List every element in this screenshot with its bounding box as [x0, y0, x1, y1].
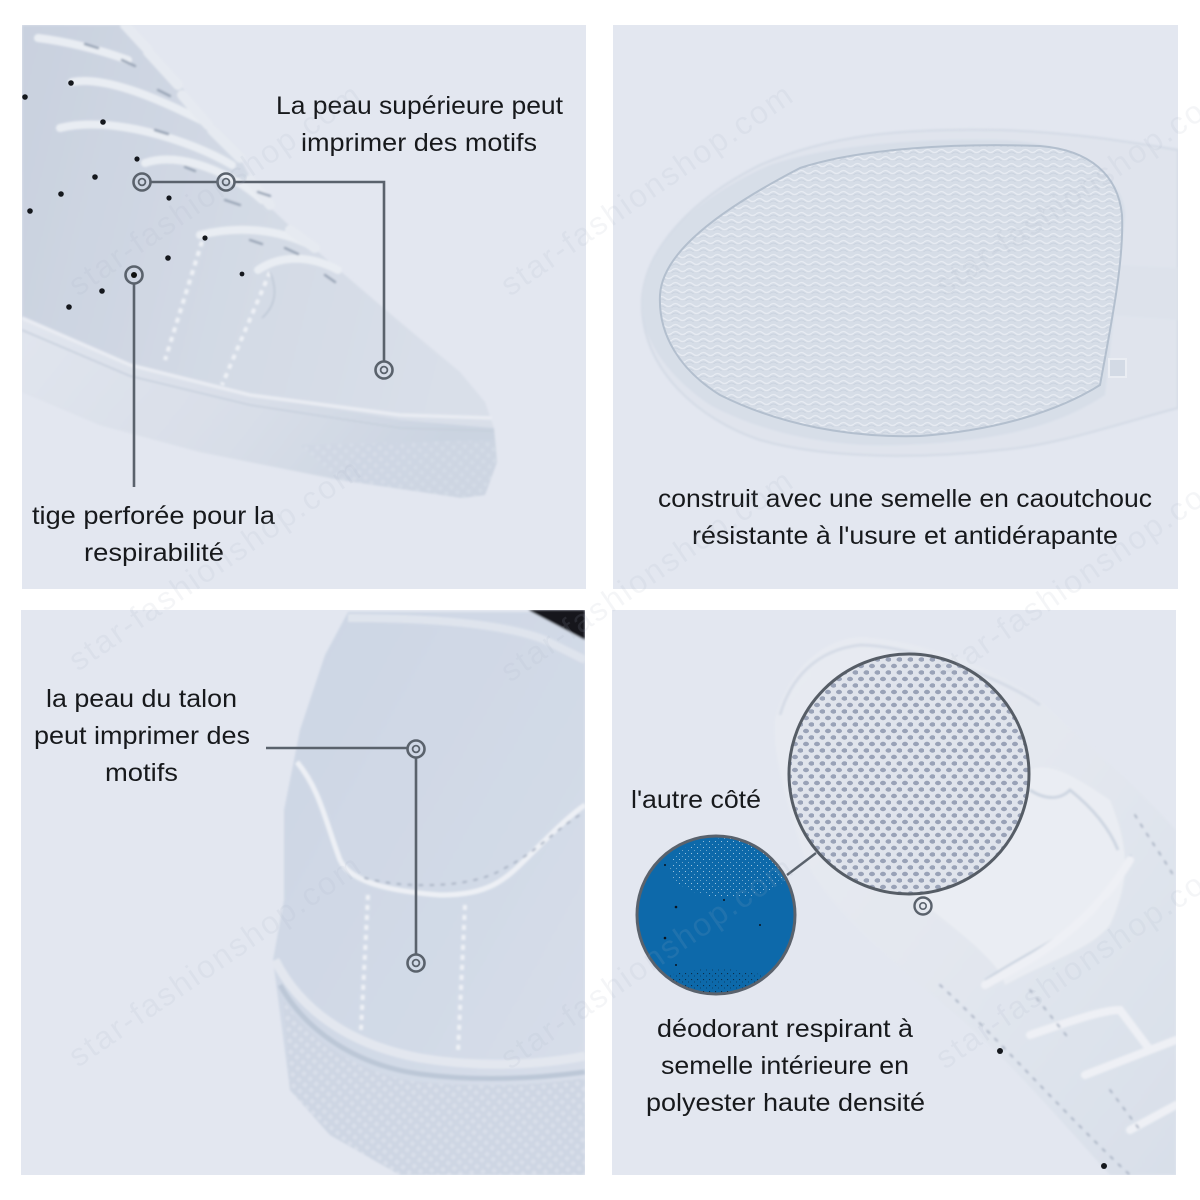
sole logo mark: [1109, 359, 1126, 377]
text: heel skin: peut imprimer des: [34, 722, 250, 750]
shoe heel: [273, 610, 585, 1175]
callout leader: perforation: [126, 266, 142, 487]
sole tread pattern: [660, 145, 1122, 436]
text: upper skin: imprimer des motifs: [301, 129, 537, 157]
text: upper skin: La peau supérieure peut: [276, 92, 563, 120]
text: perforated upper: [32, 502, 275, 567]
callout leader: upper skin: [134, 174, 392, 378]
text: heel skin: [36, 689, 249, 781]
text: rubber sole: [658, 485, 1152, 550]
panel: outsole detail: [613, 25, 1178, 589]
shoe seen from above: [775, 637, 1176, 1175]
text: insole description: [646, 1015, 925, 1117]
text: heel skin: la peau du talon: [46, 685, 237, 713]
text: other side: l'autre côté: [631, 786, 761, 814]
text: rubber sole: résistante à l'usure et antidérapante: [692, 522, 1118, 550]
marker: insole: [914, 898, 932, 914]
watermarks: [62, 77, 1200, 1076]
connector line between circles: [787, 853, 816, 875]
watermarks: star-fashionshop.com: [62, 848, 367, 1074]
shoe toe side view: [22, 25, 497, 498]
text: insole description: polyester haute densité: [646, 1089, 925, 1117]
text: insole description: semelle intérieure en: [661, 1052, 909, 1080]
watermarks: star-fashionshop.com: [494, 850, 799, 1076]
text: upper skin: [276, 92, 563, 157]
panel: insole detail: [612, 610, 1176, 1175]
text: rubber sole: construit avec une semelle en caoutchouc: [658, 485, 1152, 513]
watermarks: star-fashionshop.com: [62, 452, 367, 678]
text: perforated upper: tige perforée pour la: [32, 502, 275, 530]
blue deodorant insole circle: [637, 836, 795, 1001]
panel: toe upper detail: [22, 25, 586, 589]
watermarks: star-fashionshop.com: [62, 77, 367, 303]
text: perforated upper: respirabilité: [84, 539, 224, 567]
panel: heel detail: [21, 610, 585, 1175]
watermarks: star-fashionshop.com: [494, 77, 799, 303]
perforation dots: [22, 80, 244, 310]
sole outer rim: [642, 130, 1178, 456]
callout leader: heel skin: [266, 740, 424, 972]
text: insole description: déodorant respirant à: [657, 1015, 913, 1043]
text: heel skin: motifs: [105, 759, 178, 787]
watermarks: star-fashionshop.com: [494, 463, 799, 689]
magnified mesh circle: [789, 654, 1029, 894]
